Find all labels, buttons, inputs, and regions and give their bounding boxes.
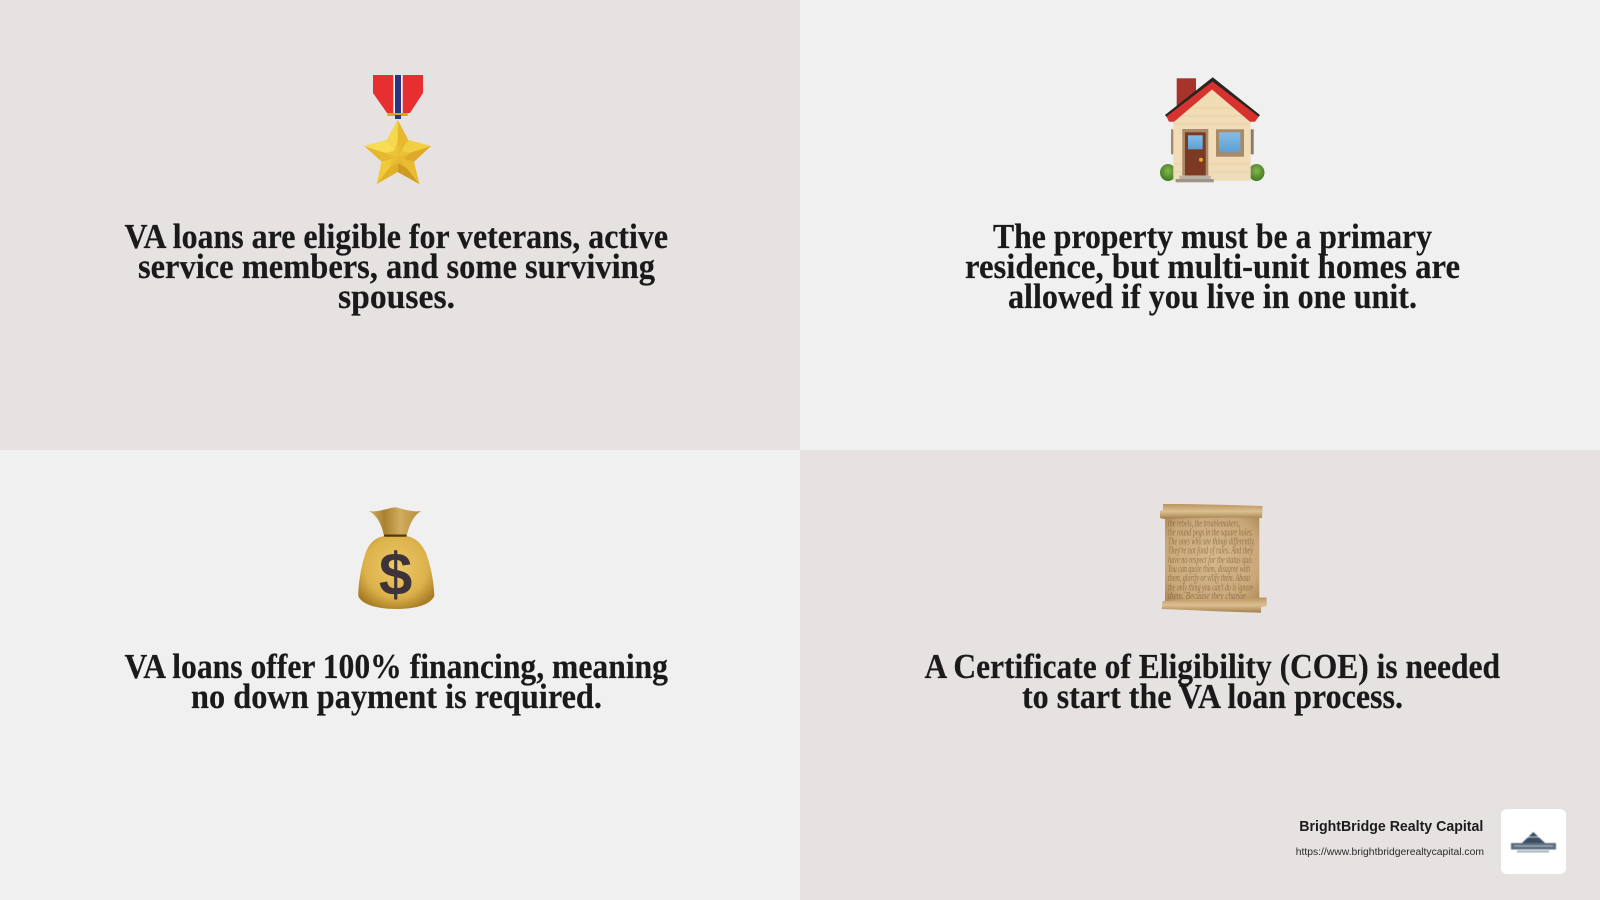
icon: parchment scroll bbox=[1160, 504, 1267, 613]
icon: money bag: $ bbox=[379, 541, 412, 608]
heading: financing statement: no down payment is required. bbox=[191, 677, 602, 716]
heading: certificate statement bbox=[924, 647, 1500, 716]
icon: parchment scroll: the round pegs in the square holes. bbox=[1168, 528, 1253, 538]
heading: eligibility statement: spouses. bbox=[338, 277, 455, 316]
icon: military medal bbox=[364, 75, 431, 184]
brand name: BrightBridge Realty Capital bbox=[1299, 818, 1483, 835]
website url: https://www.brightbridgerealtycapital.com bbox=[1296, 846, 1484, 858]
heading: property statement: allowed if you live in one unit. bbox=[1008, 277, 1417, 316]
icon: parchment scroll: the rebels, the troublemakers, bbox=[1168, 519, 1240, 530]
panel: eligibility bbox=[0, 0, 800, 450]
heading: financing statement: VA loans offer 100% financing, meaning bbox=[124, 647, 668, 686]
heading: property statement: The property must be a primary bbox=[993, 217, 1432, 256]
icon: parchment scroll: They're not fond of rules. And they bbox=[1168, 546, 1253, 556]
logo badge bbox=[1501, 809, 1566, 874]
icon: parchment scroll: them, glorify or vilify them. About bbox=[1168, 573, 1250, 584]
icon: parchment scroll: them. Because they change bbox=[1168, 591, 1246, 602]
icon: parchment scroll: have no respect for the status quo. bbox=[1168, 555, 1253, 566]
panel: property bbox=[800, 0, 1600, 450]
heading: financing statement bbox=[124, 647, 668, 716]
heading: certificate statement: to start the VA loan process. bbox=[1022, 677, 1403, 716]
heading: property statement: residence, but multi-unit homes are bbox=[965, 247, 1460, 286]
panel: certificate bbox=[800, 450, 1600, 900]
heading: eligibility statement: service members, and some surviving bbox=[138, 247, 655, 286]
heading: property statement bbox=[965, 217, 1460, 316]
heading: certificate statement: A Certificate of Eligibility (COE) is needed bbox=[924, 647, 1500, 686]
icon: parchment scroll: The ones who see things differently. bbox=[1168, 536, 1255, 548]
heading: eligibility statement bbox=[124, 217, 668, 316]
icon: house bbox=[1160, 77, 1264, 182]
panel: financing bbox=[0, 450, 800, 900]
icon: parchment scroll: You can quote them, disagree with bbox=[1168, 564, 1250, 575]
icon: money bag bbox=[358, 507, 434, 609]
icon: parchment scroll: the only thing you can't do is ignore bbox=[1168, 583, 1253, 594]
heading: eligibility statement: VA loans are eligible for veterans, active bbox=[124, 217, 668, 256]
